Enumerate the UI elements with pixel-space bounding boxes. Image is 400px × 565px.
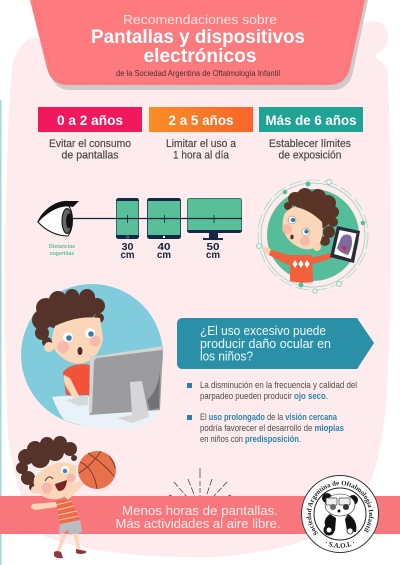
basketball <box>78 451 116 489</box>
hair <box>16 436 77 491</box>
age group: Más de 6 años: Más de 6 años <box>266 112 357 128</box>
question callout <box>177 318 374 369</box>
illustration: boy with basketball <box>16 436 116 558</box>
bullet: miopías: en niños con predisposición. <box>200 434 301 445</box>
bullet: ojo seco: parpadeo pueden producir ojo seco. <box>200 391 328 402</box>
bullet: ojo seco <box>187 380 357 402</box>
age group: Más de 6 años <box>259 107 363 162</box>
age group: 0 a 2 años: de pantallas <box>62 150 119 162</box>
head <box>282 207 322 251</box>
arms <box>267 249 332 265</box>
bottom banner <box>0 496 400 534</box>
distance labels: 40 <box>158 241 171 253</box>
sight line <box>70 215 242 223</box>
distance labels: 30 <box>122 241 134 253</box>
illustration: boy with tablet <box>256 180 368 293</box>
hair <box>32 289 105 347</box>
icon: tablet 40 cm <box>147 198 181 239</box>
caption: distancias sugeridas <box>49 244 75 257</box>
icon: eye <box>37 201 79 236</box>
bullet: miopías: El uso prolongado de la visión cercana <box>200 412 338 423</box>
question callout: los niños? <box>200 350 253 364</box>
distance labels: cm <box>206 249 220 261</box>
illustration: boy at computer <box>21 284 163 428</box>
arms <box>31 502 57 510</box>
age group: Más de 6 años: Establecer límites <box>269 138 351 150</box>
bottom banner: Más actividades al aire libre. <box>116 516 280 531</box>
computer monitor <box>89 346 163 415</box>
sunburst lines <box>169 468 231 497</box>
logo: S.A.O.I. seal: · S.A.O.I. · <box>326 542 354 548</box>
head <box>31 462 76 499</box>
title <box>91 12 305 78</box>
shirt <box>290 255 313 283</box>
computer stand <box>117 381 149 423</box>
keyboard <box>66 395 88 406</box>
age group: Más de 6 años: de exposición <box>278 150 342 162</box>
title: de la Sociedad Argentina de Oftalmología Infantil <box>116 69 280 78</box>
bullet: ojo seco: La disminución en la frecuencia y calidad del <box>200 380 357 391</box>
logo: S.A.O.I. seal: Sociedad Argentina de Oftalmología Infantil <box>306 480 374 536</box>
title: Recomendaciones sobre <box>123 12 277 27</box>
question callout: ¿El uso excesivo puede <box>200 324 326 338</box>
age group: 0 a 2 años: Evitar el consumo <box>49 138 131 150</box>
icon: monitor 50 cm <box>187 198 242 240</box>
question callout: producir daño ocular en <box>200 337 331 351</box>
tablet <box>330 226 360 263</box>
distance labels: cm <box>157 249 171 261</box>
shorts <box>59 519 82 535</box>
header banner <box>30 0 368 90</box>
bullet: miopías <box>187 412 344 445</box>
age group: 0 a 2 años: 0 a 2 años <box>57 112 123 128</box>
age group: 0 a 2 años <box>38 107 142 162</box>
logo: S.A.O.I. seal <box>301 475 379 553</box>
title: Pantallas y dispositivos <box>91 27 305 48</box>
caption: distancias sugeridas: sugeridas <box>50 251 74 257</box>
distance labels <box>120 241 220 261</box>
age group: 2 a 5 años <box>149 107 253 162</box>
age group: 2 a 5 años: 2 a 5 años <box>168 112 234 128</box>
distance diagram <box>37 198 242 261</box>
left edge teal line <box>0 100 2 565</box>
bullet: miopías: podría favorecer el desarrollo de miopias <box>200 423 344 434</box>
title: electrónicos <box>144 46 256 67</box>
age group: 2 a 5 años: 1 hora al día <box>173 150 230 162</box>
icon: phone 30 cm <box>116 198 139 239</box>
caption: distancias sugeridas: Distancias <box>49 244 75 250</box>
head <box>44 317 103 364</box>
shirt <box>55 498 80 524</box>
distance labels: 50 <box>206 241 220 253</box>
age group: 2 a 5 años: Limitar el uso a <box>166 138 237 150</box>
panda <box>322 493 358 536</box>
shirt <box>63 364 90 395</box>
legs <box>57 532 80 551</box>
hair <box>284 188 339 246</box>
bottom banner: Menos horas de pantallas. <box>122 503 278 518</box>
distance labels: cm <box>120 249 134 261</box>
